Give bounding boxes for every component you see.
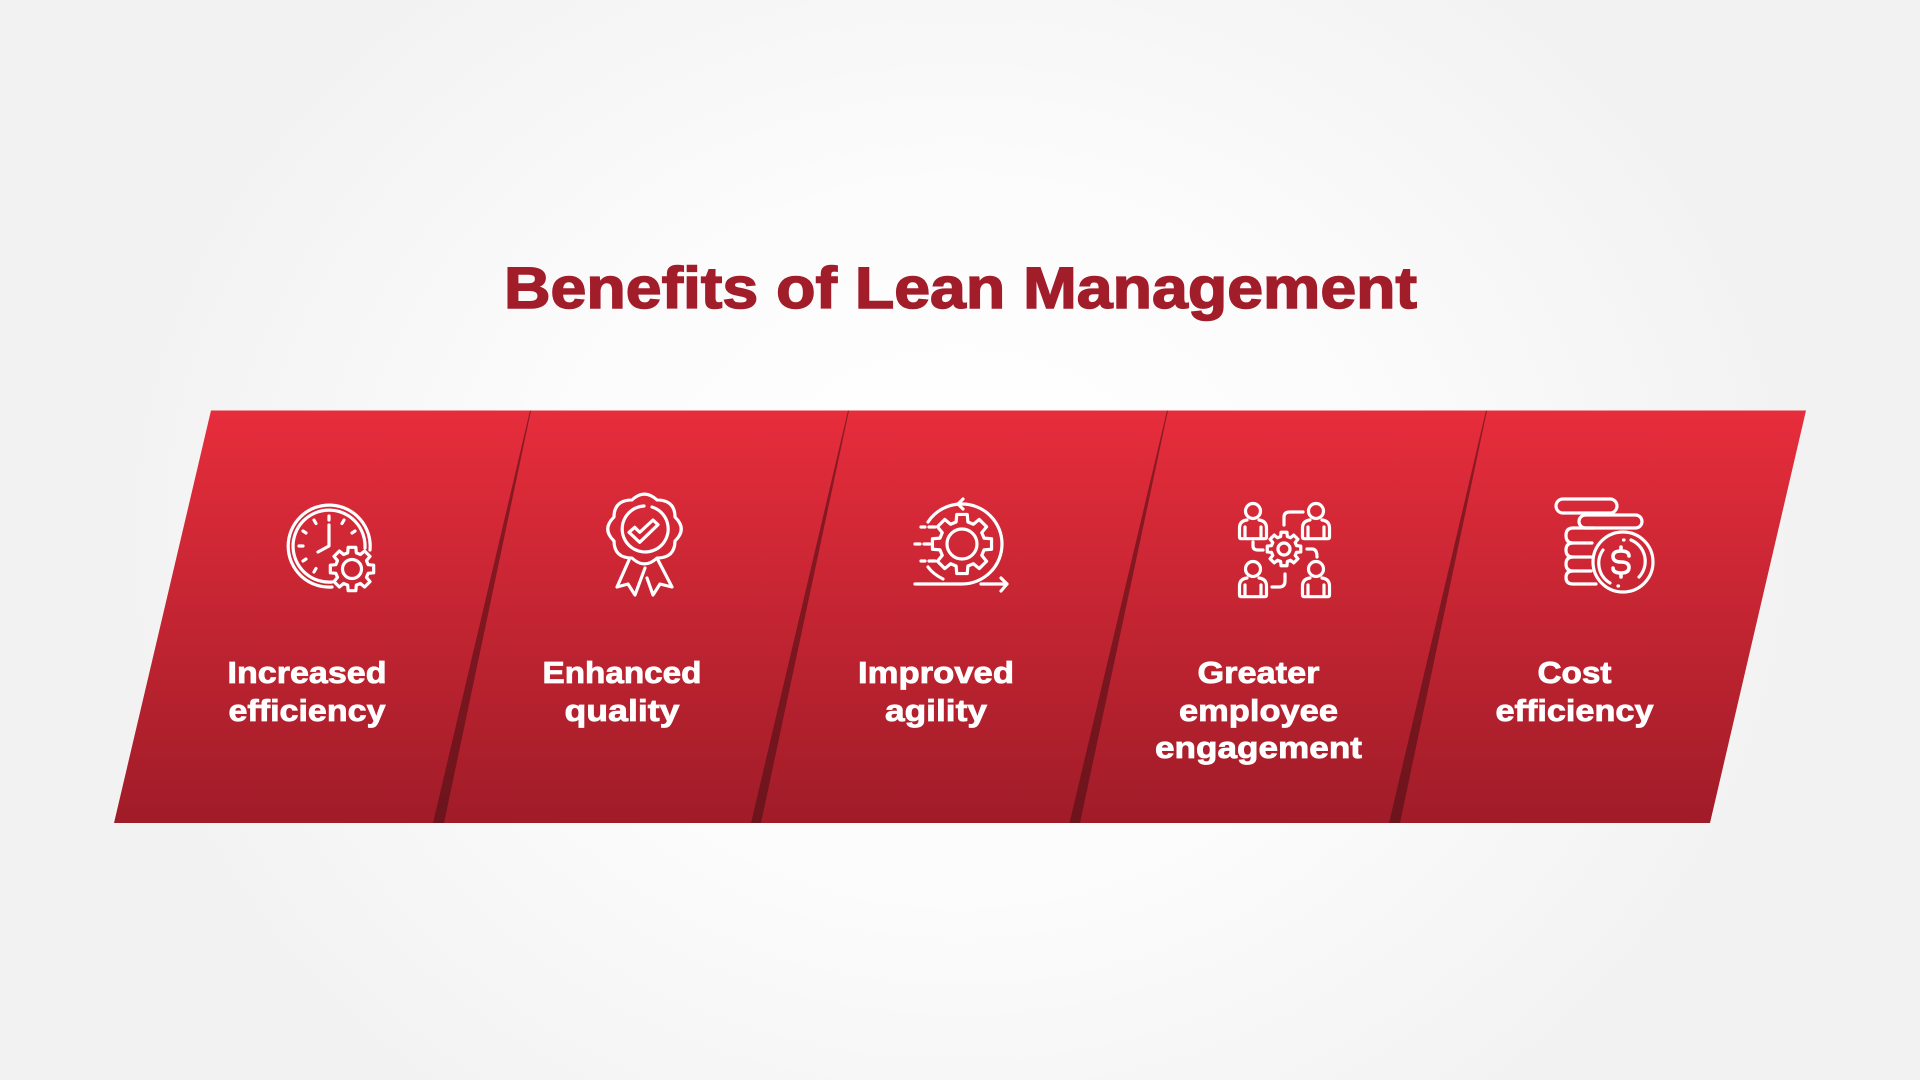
label: cost efficiency: [1496, 655, 1654, 728]
label: improved agility: [858, 655, 1014, 728]
panel: increased efficiency: [228, 505, 386, 728]
label: increased efficiency: Increased: [228, 655, 386, 690]
panel: cost efficiency: [1496, 499, 1654, 728]
label: improved agility: Improved: [858, 655, 1014, 690]
label: increased efficiency: efficiency: [228, 693, 386, 728]
label: greater employee engagement: Greater: [1198, 655, 1320, 690]
label: cost efficiency: efficiency: [1496, 693, 1654, 728]
label: greater employee engagement: [1155, 655, 1362, 765]
label: enhanced quality: [542, 655, 702, 728]
label: greater employee engagement: employee: [1179, 693, 1338, 728]
panel: improved agility: [858, 499, 1014, 728]
label: enhanced quality: quality: [564, 693, 680, 728]
panel: red parallelogram band: [114, 410, 1806, 823]
label: increased efficiency: [228, 655, 386, 728]
title: Benefits of Lean Management: [504, 256, 1417, 321]
icon: award rosette: [608, 494, 681, 595]
icon: coin stack with dollar: [1556, 499, 1653, 592]
label: enhanced quality: Enhanced: [542, 655, 702, 690]
icon: clock with gear: [288, 505, 374, 591]
icon: gear in agile loop: [915, 499, 1007, 591]
label: cost efficiency: Cost: [1538, 655, 1612, 690]
panel: greater employee engagement: [1155, 504, 1362, 765]
panel: enhanced quality: [542, 494, 702, 728]
label: greater employee engagement: engagement: [1155, 730, 1362, 765]
label: improved agility: agility: [885, 693, 988, 728]
icon: team around gear: [1240, 504, 1330, 597]
